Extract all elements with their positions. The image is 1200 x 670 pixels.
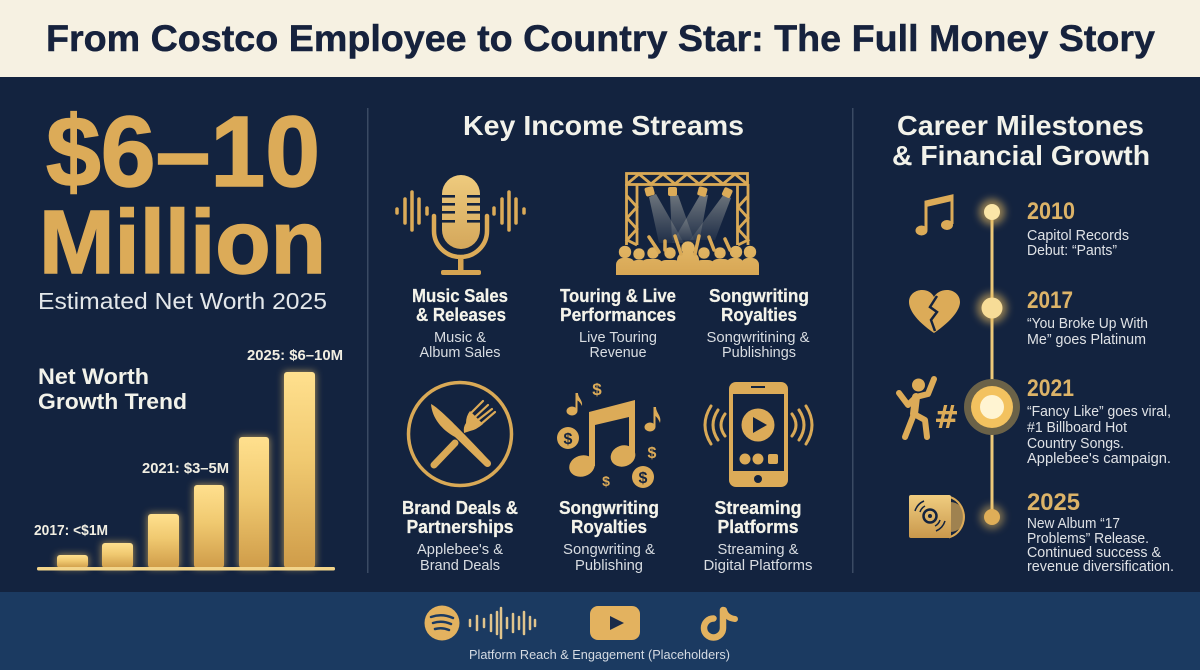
heading: Career Milestones bbox=[897, 110, 1144, 141]
icon: microphone bbox=[397, 175, 524, 275]
headline figure: $6–10 bbox=[46, 96, 320, 208]
milestone 2017: Me” goes Platinum bbox=[1027, 332, 1146, 348]
milestone 2021: Applebee's campaign. bbox=[1027, 451, 1171, 467]
stream text: touring: Touring & Live bbox=[560, 286, 676, 306]
panel: career milestones bbox=[892, 110, 1174, 575]
stream text: streaming: Digital Platforms bbox=[704, 557, 812, 574]
stream text: songwriting royalties bottom: Publishing bbox=[575, 557, 643, 574]
icon: waveform bbox=[470, 608, 535, 638]
timeline bbox=[964, 199, 1020, 529]
stream text: touring: Revenue bbox=[590, 344, 646, 361]
milestone 2010: Capitol Records bbox=[1027, 228, 1129, 244]
stream text: songwriting royalties top: Songwriting bbox=[709, 286, 809, 306]
icon: tiktok bbox=[704, 610, 735, 638]
stream text: streaming: Streaming & bbox=[718, 541, 798, 558]
heading: Key Income Streams bbox=[463, 110, 744, 141]
icon: youtube bbox=[590, 606, 640, 640]
stream text: music sales bbox=[412, 286, 508, 361]
icon: dancer and hashtag: # bbox=[934, 398, 959, 436]
milestone 2021: #1 Billboard Hot bbox=[1027, 420, 1127, 436]
stream text: music sales: & Releases bbox=[416, 305, 506, 325]
milestone 2025: revenue diversification. bbox=[1027, 559, 1174, 575]
stream text: streaming: Platforms bbox=[718, 517, 798, 537]
stream text: streaming: Streaming bbox=[714, 498, 802, 518]
milestone 2017: “You Broke Up With bbox=[1027, 316, 1148, 332]
milestone 2025: Continued success & bbox=[1027, 545, 1161, 561]
stream text: songwriting royalties top: Publishings bbox=[722, 344, 796, 361]
icon: music note with coins: $ bbox=[564, 431, 573, 448]
milestone 2025: 2025 bbox=[1027, 489, 1080, 516]
icon: music note with coins: $ bbox=[602, 473, 610, 489]
stream text: songwriting royalties bottom: Songwriting bbox=[559, 498, 659, 518]
milestone 2021: “Fancy Like” goes viral, bbox=[1027, 404, 1171, 420]
stream text: streaming bbox=[704, 498, 812, 574]
milestone 2010: Debut: “Pants” bbox=[1027, 243, 1117, 259]
icon: album bbox=[909, 495, 965, 538]
milestone 2025: Problems” Release. bbox=[1027, 531, 1149, 547]
panel: income streams bbox=[397, 110, 812, 574]
milestone 2025 bbox=[1027, 489, 1174, 575]
stream text: brand deals: Applebee's & bbox=[417, 541, 503, 558]
heading bbox=[892, 110, 1150, 171]
icon: spotify bbox=[424, 606, 460, 640]
icon: phone streaming bbox=[705, 382, 812, 487]
headline unit: Million bbox=[39, 193, 326, 293]
bar label 2017: 2017: <$1M bbox=[34, 522, 108, 539]
icon: music note with coins: $ bbox=[639, 470, 648, 487]
chart heading: Net Worth bbox=[38, 364, 149, 389]
stream text: brand deals: Brand Deals & bbox=[402, 498, 518, 518]
stream text: brand deals bbox=[402, 498, 518, 574]
icon: broken heart bbox=[909, 290, 960, 333]
stream text: songwriting royalties bottom: Songwriting & bbox=[563, 541, 655, 558]
icon: music note with coins bbox=[557, 380, 660, 489]
icon: music note with coins: $ bbox=[592, 380, 602, 399]
header band bbox=[0, 0, 1200, 77]
milestone 2010 bbox=[1027, 198, 1129, 259]
footer caption: Platform Reach & Engagement (Placeholders) bbox=[469, 647, 730, 662]
chart heading: Growth Trend bbox=[38, 389, 187, 414]
milestone 2017 bbox=[1027, 287, 1148, 348]
stream text: songwriting royalties bottom: Royalties bbox=[571, 517, 647, 537]
net worth caption: Estimated Net Worth 2025 bbox=[38, 288, 327, 314]
stream text: music sales: Music Sales bbox=[412, 286, 508, 306]
bar chart bbox=[34, 347, 343, 570]
icon: music notes bbox=[916, 196, 953, 236]
stream text: touring: Live Touring bbox=[579, 329, 657, 346]
bar label 2025: 2025: $6–10M bbox=[247, 347, 343, 364]
heading: & Financial Growth bbox=[892, 140, 1150, 171]
icon: dancer and hashtag bbox=[899, 378, 959, 437]
milestone 2021 bbox=[1027, 375, 1171, 467]
panel: platform footer bbox=[0, 592, 1200, 670]
stream text: touring bbox=[560, 286, 676, 361]
icon: concert stage bbox=[616, 174, 759, 275]
icon: music note with coins: $ bbox=[648, 445, 657, 462]
stream text: songwriting royalties bottom bbox=[559, 498, 659, 574]
stream text: songwriting royalties top bbox=[706, 286, 810, 361]
title: From Costco Employee to Country Star: The Full Money Story bbox=[46, 18, 1155, 59]
panel: net worth bbox=[34, 96, 343, 570]
stream text: music sales: Album Sales bbox=[420, 344, 500, 361]
stream text: music sales: Music & bbox=[434, 329, 486, 346]
icon: knife and fork bbox=[408, 382, 512, 486]
stream text: songwriting royalties top: Songwritining & bbox=[706, 329, 810, 346]
chart heading bbox=[38, 364, 187, 414]
stream text: touring: Performances bbox=[560, 305, 676, 325]
milestone 2021: 2021 bbox=[1027, 375, 1074, 402]
bar label 2021: 2021: $3–5M bbox=[142, 460, 229, 477]
milestone 2021: Country Songs. bbox=[1027, 436, 1124, 452]
stream text: songwriting royalties top: Royalties bbox=[721, 305, 797, 325]
stream text: brand deals: Partnerships bbox=[406, 517, 514, 537]
stream text: brand deals: Brand Deals bbox=[420, 557, 500, 574]
milestone 2010: 2010 bbox=[1027, 198, 1075, 225]
milestone 2017: 2017 bbox=[1027, 287, 1073, 314]
milestone 2025: New Album “17 bbox=[1027, 516, 1120, 532]
